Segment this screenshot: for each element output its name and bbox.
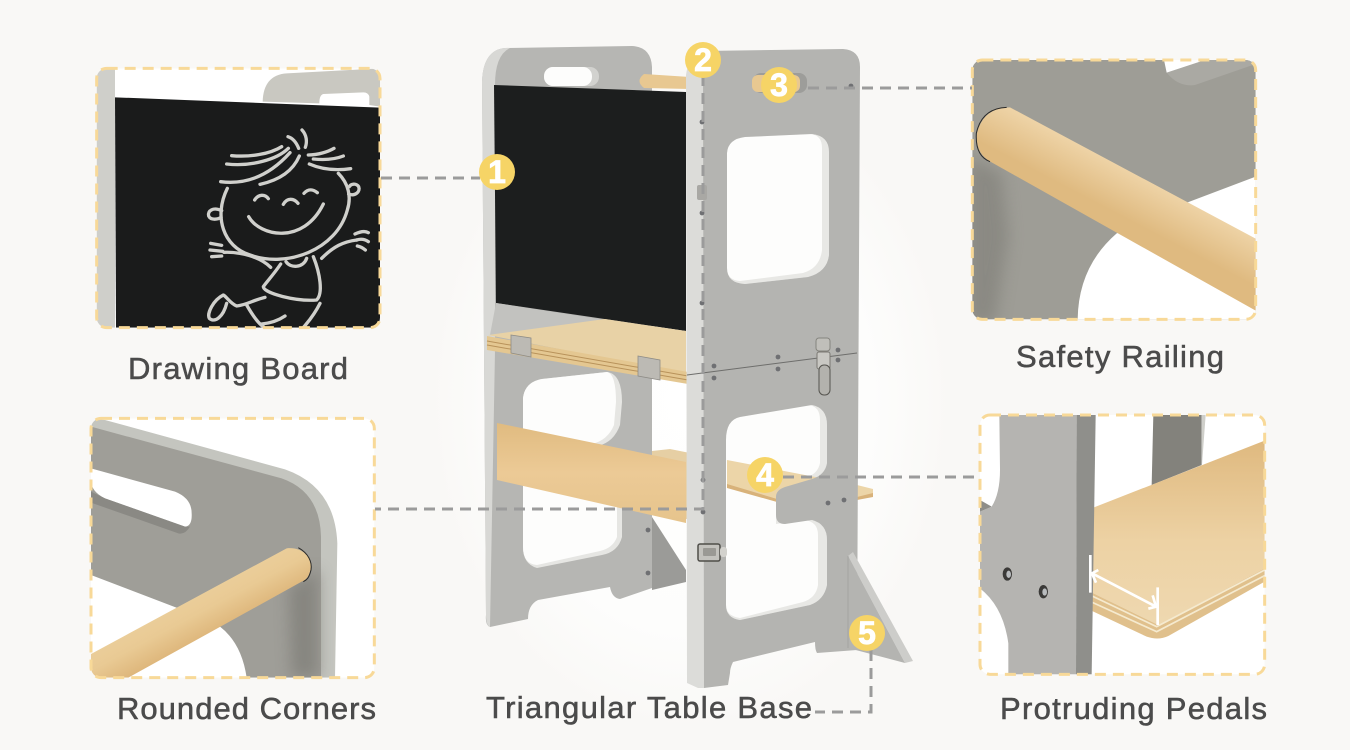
panel: rounded corners detail — [91, 418, 374, 678]
panel border — [980, 415, 1265, 674]
marker 5: 5 — [858, 615, 876, 651]
wood back support — [497, 423, 686, 523]
folded shelf — [487, 319, 688, 384]
chalk drawing of a smiling child — [208, 130, 368, 328]
front latch — [816, 338, 830, 395]
marker 3: 3 — [770, 67, 788, 103]
panel: safety railing detail — [968, 60, 1256, 323]
board corner face — [91, 427, 321, 678]
callout line 1 — [381, 176, 480, 180]
triangular base — [848, 552, 913, 663]
marker 4 — [747, 457, 783, 493]
marker 3 — [761, 67, 797, 103]
back handle slot — [544, 67, 599, 86]
board corner edge — [91, 418, 337, 678]
chalkboard surface — [115, 97, 380, 328]
front panel side — [686, 51, 704, 688]
side latch — [698, 544, 727, 561]
label: protruding pedals: Protruding Pedals — [1000, 691, 1267, 726]
width arrow — [1090, 555, 1158, 625]
back window — [523, 372, 622, 568]
front panel window reveals — [726, 134, 829, 620]
front post — [980, 415, 1077, 674]
callout line 4 — [783, 476, 980, 478]
chalkboard — [494, 85, 686, 331]
marker 4: 4 — [756, 457, 774, 493]
hinges — [511, 335, 531, 357]
marker 1 — [479, 154, 515, 190]
pedal plywood edge — [1090, 568, 1265, 639]
marker 5 — [849, 615, 885, 651]
label: triangular table base: Triangular Table Base — [486, 690, 812, 725]
pedal board — [727, 460, 873, 502]
top handle with rail — [752, 73, 807, 93]
triangular brace behind — [652, 517, 686, 590]
label: drawing board: Drawing Board — [128, 351, 348, 386]
front panel face — [703, 49, 860, 688]
top rail — [640, 74, 690, 89]
panel: drawing board detail — [97, 68, 380, 328]
panel border — [972, 60, 1256, 319]
label: rounded corners: Rounded Corners — [117, 691, 376, 726]
product: learning tower — [482, 46, 913, 688]
handle slot — [91, 468, 192, 527]
wooden rail — [91, 548, 311, 678]
screws — [1003, 567, 1012, 581]
pedal top — [1090, 441, 1265, 625]
callout line 3 — [808, 86, 972, 90]
marker 2: 2 — [694, 42, 712, 78]
panel: protruding pedals detail — [980, 415, 1265, 674]
back panel — [482, 46, 652, 627]
callout line 2 — [375, 75, 703, 509]
panel border — [97, 68, 380, 328]
side clasp upper — [697, 185, 707, 200]
callout line 5 — [815, 650, 871, 712]
screws — [646, 84, 855, 621]
label: safety railing: Safety Railing — [1016, 339, 1224, 374]
marker 2 — [685, 42, 721, 78]
pedal far section — [652, 449, 690, 520]
wooden rail — [977, 107, 1256, 311]
rear post — [1152, 415, 1202, 485]
panel border — [91, 418, 374, 678]
board bottom gap — [490, 303, 605, 335]
marker 1: 1 — [488, 154, 506, 190]
icon: board handle behind — [263, 68, 380, 107]
seam line — [687, 353, 857, 375]
